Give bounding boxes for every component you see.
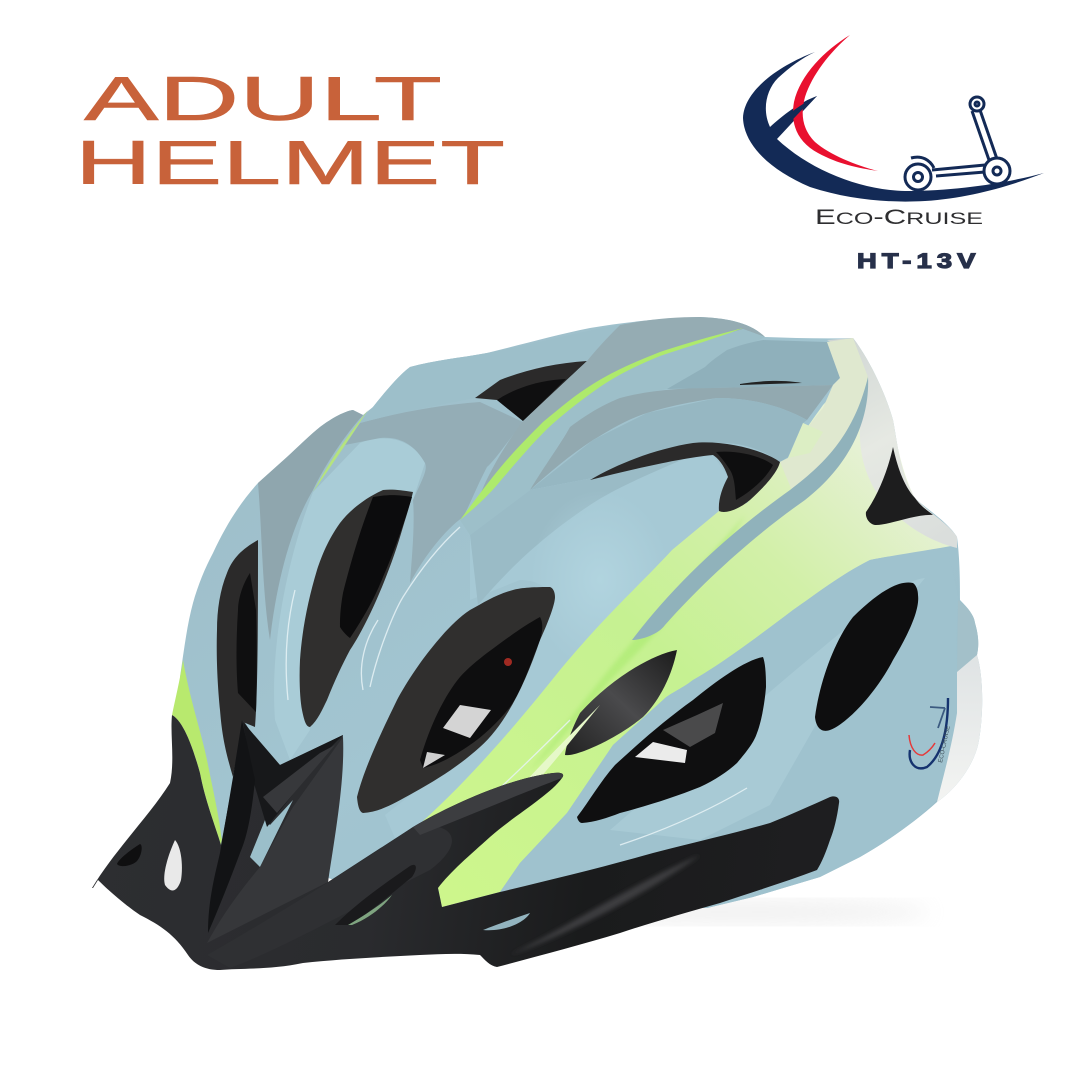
central glow <box>530 490 670 670</box>
rear dark notch <box>866 447 933 525</box>
green highlight <box>500 705 600 810</box>
rear white shell <box>937 655 982 802</box>
floor shadow <box>550 900 930 924</box>
vent: mid crown interior <box>716 452 773 500</box>
vent: left centre interior <box>340 495 412 638</box>
visor big grey spike <box>207 737 343 943</box>
visor slot green <box>348 895 392 925</box>
visor slot <box>335 865 416 925</box>
vent: large textured <box>357 587 555 813</box>
navy swoosh <box>743 52 1044 202</box>
green side stripe on left edge <box>172 660 222 845</box>
vent: interior lower window <box>423 752 445 768</box>
visor ridge towards arm <box>207 826 452 968</box>
grey left crown panel <box>258 410 363 640</box>
translucent panel edge <box>788 423 823 458</box>
white rear panel <box>827 338 957 548</box>
vent: left centre <box>300 490 413 727</box>
logo: Eco-Cruise scooter mark <box>743 35 1044 229</box>
visor <box>92 715 839 970</box>
blue stripe through green <box>632 377 868 640</box>
title: Adult Helmet: ADULT <box>84 65 442 134</box>
green crown stripe <box>460 328 743 520</box>
blue fin over crown <box>313 325 620 492</box>
visor hole small <box>117 844 142 866</box>
white top-side panel <box>780 338 868 493</box>
grey centre panel <box>345 402 523 583</box>
grey ridge <box>530 385 833 490</box>
title: Adult Helmet <box>75 65 505 198</box>
model code: HT-13V <box>857 250 981 273</box>
centre grey wedge <box>470 456 690 605</box>
title: Adult Helmet: HELMET <box>75 129 505 198</box>
helmet sticker logo: ECO-CRUISE <box>938 725 952 763</box>
vent: upper crown <box>475 361 587 421</box>
grey crown band <box>480 317 765 495</box>
visor hole open <box>164 840 182 890</box>
lobe inner highlight <box>610 578 925 840</box>
centre light panel <box>385 455 728 850</box>
blue upper panel <box>530 398 807 490</box>
vent: mid crown <box>590 442 780 512</box>
green band <box>413 370 957 907</box>
vent: interior red reflector <box>504 658 512 666</box>
visor arm light <box>413 773 563 835</box>
vent: side white strip <box>635 742 687 763</box>
vent: large interior <box>420 617 542 768</box>
visor dark valley <box>208 720 255 933</box>
blue crown band <box>460 329 765 535</box>
highlight streaks <box>286 527 747 845</box>
helmet shell <box>180 317 982 908</box>
rear blue-grey shell <box>957 600 978 672</box>
vent: side grey pad <box>663 703 723 747</box>
blue side lobe <box>500 550 958 908</box>
scooter icon <box>905 97 1010 190</box>
vent: far left interior <box>236 573 257 712</box>
visor grain ridge <box>510 855 700 955</box>
vent: right side <box>815 582 918 731</box>
green sliver at crown edge <box>313 410 368 492</box>
vent: air lens <box>565 650 677 755</box>
helmet sticker logo <box>909 698 952 768</box>
vent: side lower <box>577 657 766 823</box>
vent: far left <box>217 540 258 777</box>
vent: upper crown interior <box>497 379 566 421</box>
red arc <box>793 35 878 171</box>
grey rear crown recess <box>667 340 840 389</box>
crown rear slit <box>740 381 802 385</box>
helmet illustration <box>92 317 982 970</box>
visor right slot <box>483 913 530 930</box>
visor chevron ridge <box>263 745 335 813</box>
saturated green core <box>530 515 745 770</box>
vent: interior window <box>443 705 491 738</box>
logo wordmark: E CO -C RUISE <box>815 206 983 229</box>
bright front rim panel <box>274 438 425 760</box>
visor black chevron <box>243 722 343 827</box>
navy sliver over the red arc <box>772 96 817 136</box>
visor blue gap <box>250 800 293 867</box>
